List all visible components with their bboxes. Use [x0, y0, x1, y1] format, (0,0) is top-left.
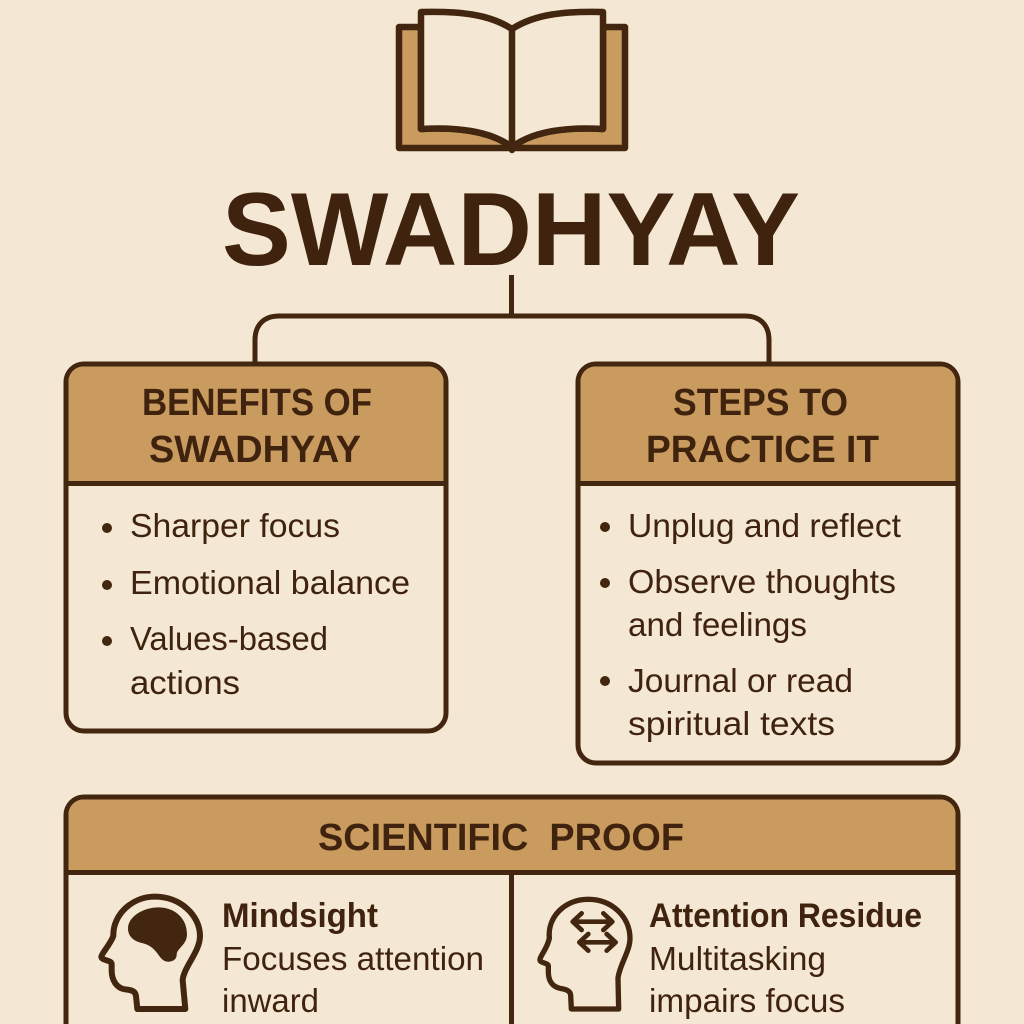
- steps list: [600, 507, 901, 742]
- steps list: Journal or read: [628, 662, 853, 699]
- steps header divider: [578, 481, 958, 486]
- icon: head with arrows: [540, 899, 630, 1009]
- scientific proof divider: [66, 872, 958, 1024]
- icon: open book: [399, 12, 625, 150]
- benefits header divider: [66, 481, 446, 486]
- benefits list: [102, 507, 410, 701]
- steps list: spiritual texts: [628, 705, 835, 742]
- attention residue text: Multitasking: [649, 940, 826, 977]
- scientific proof header band: [68, 800, 956, 871]
- mindsight text: [222, 897, 484, 1019]
- steps heading: PRACTICE IT: [646, 429, 879, 471]
- connector lines: [255, 275, 769, 362]
- steps heading: STEPS TO: [673, 382, 848, 424]
- benefits list: actions: [130, 664, 240, 701]
- panel: steps to practice it: [578, 364, 958, 763]
- attention residue text: impairs focus: [649, 982, 845, 1019]
- steps list: Unplug and reflect: [628, 507, 901, 544]
- icon: head with brain: [101, 897, 200, 1009]
- benefits heading: BENEFITS OF: [142, 382, 372, 424]
- title: SWADHYAY: [222, 172, 800, 288]
- steps list: Observe thoughts: [628, 563, 896, 600]
- mindsight text: Focuses attention: [222, 940, 484, 977]
- panel: scientific proof: [66, 797, 958, 1024]
- panel: benefits of swadhyay: [66, 364, 446, 731]
- scientific proof heading: SCIENTIFIC PROOF: [318, 817, 684, 859]
- steps header band: [580, 366, 956, 483]
- benefits list: Emotional balance: [130, 564, 410, 601]
- attention residue text: [649, 897, 922, 1019]
- steps heading: [646, 382, 879, 471]
- mindsight text: inward: [222, 982, 319, 1019]
- benefits list: Values-based: [130, 620, 328, 657]
- mindsight text: Mindsight: [222, 897, 378, 935]
- benefits heading: [142, 382, 372, 471]
- benefits header band: [68, 366, 444, 483]
- benefits list: Sharper focus: [130, 507, 340, 544]
- steps list: and feelings: [628, 606, 807, 643]
- benefits heading: SWADHYAY: [149, 429, 361, 471]
- attention residue text: Attention Residue: [649, 897, 922, 935]
